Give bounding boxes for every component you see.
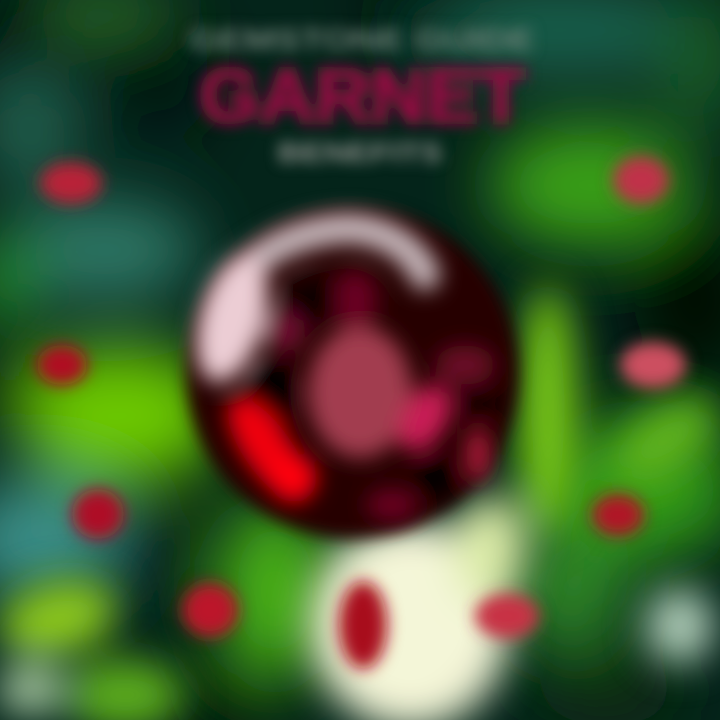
- small garnet: right 2: [620, 342, 686, 388]
- subtitle: BENEFITS: [278, 137, 442, 168]
- central garnet gem: [183, 206, 518, 538]
- small garnet: bottom right: [475, 594, 539, 638]
- small garnet: right 1: [613, 156, 669, 204]
- small garnet: left 2: [37, 345, 87, 385]
- small garnet: bottom centre: [339, 581, 387, 669]
- small garnet: left 3: [72, 489, 124, 539]
- main title: GARNET: [200, 54, 524, 139]
- small garnet: bottom left: [182, 583, 238, 637]
- small garnet: right 3: [592, 494, 644, 536]
- small garnet: left 1: [40, 162, 102, 204]
- top heading line: GEMSTONE GUIDE: [190, 22, 534, 57]
